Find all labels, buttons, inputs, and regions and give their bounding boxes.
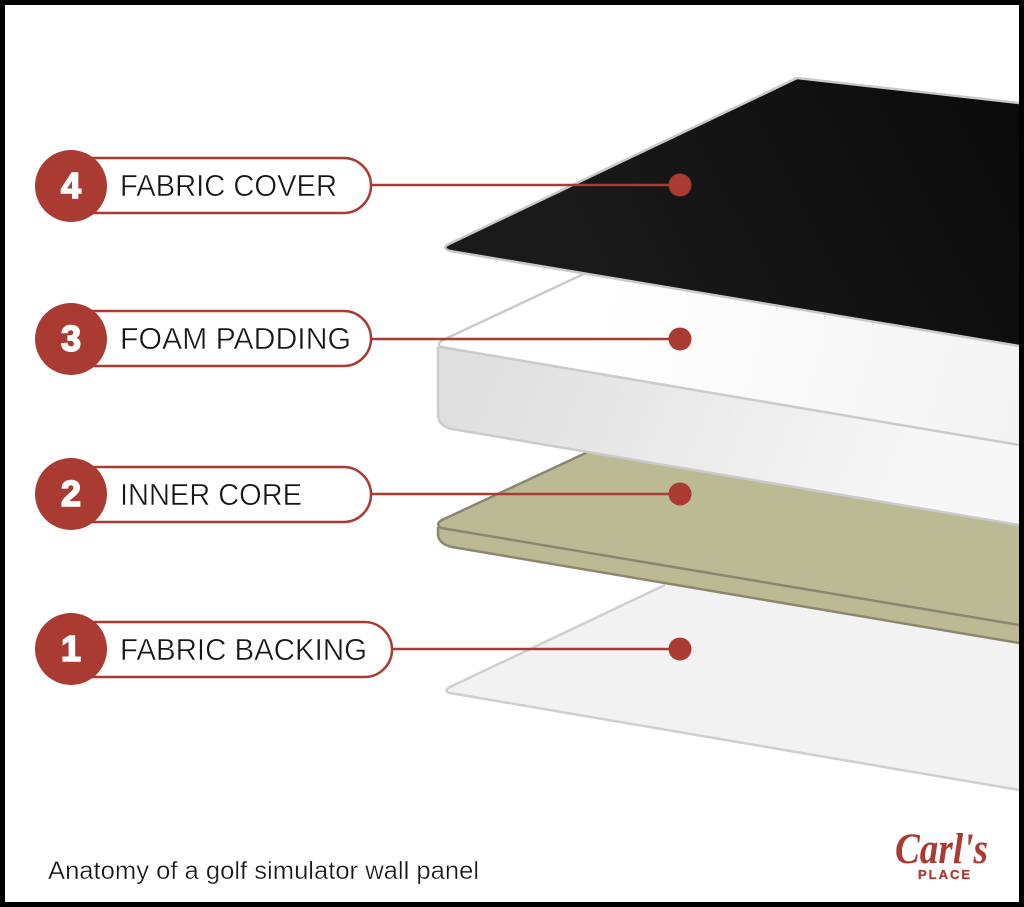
badge 4: 4 [61, 165, 81, 206]
layer 4: fabric cover [445, 78, 1019, 346]
dot 2 [668, 482, 692, 506]
badge 1: 1 [61, 628, 81, 669]
pill 2 [60, 467, 371, 522]
badge 2: 2 [61, 473, 81, 514]
label 1: FABRIC BACKING [120, 632, 367, 667]
label 2: INNER CORE [120, 477, 302, 512]
pill 1 [60, 622, 392, 677]
badge 3: 3 [61, 318, 81, 359]
leader line 4 [371, 184, 680, 186]
badge 2 [35, 458, 107, 530]
logo: Carl's Place: Carl's [895, 826, 988, 873]
label 3: FOAM PADDING [120, 321, 351, 356]
dot 3 [668, 328, 692, 350]
dot 1 [668, 638, 692, 660]
leader line 3 [371, 338, 680, 340]
pill 4 [60, 158, 371, 213]
callout 2: inner core [35, 458, 692, 530]
badge 3 [35, 303, 107, 375]
panel diagram layers [438, 78, 1019, 790]
dot 4 [668, 174, 692, 196]
callout 1: fabric backing [35, 613, 692, 685]
callout 4: fabric cover [35, 150, 692, 222]
badge 4 [35, 150, 107, 222]
layer 2: inner core [438, 440, 1019, 643]
badge 1 [35, 613, 107, 685]
leader line 1 [392, 648, 680, 650]
leader line 2 [371, 493, 680, 495]
caption: Anatomy of a golf simulator wall panel [48, 857, 479, 885]
callout 3: foam padding [35, 303, 692, 375]
pill 3 [60, 311, 371, 366]
label 4: FABRIC COVER [120, 168, 337, 203]
logo: Carl's Place: PLACE [918, 867, 970, 882]
layer 3: foam padding [438, 260, 1019, 525]
layer 1: fabric backing [446, 500, 1019, 790]
